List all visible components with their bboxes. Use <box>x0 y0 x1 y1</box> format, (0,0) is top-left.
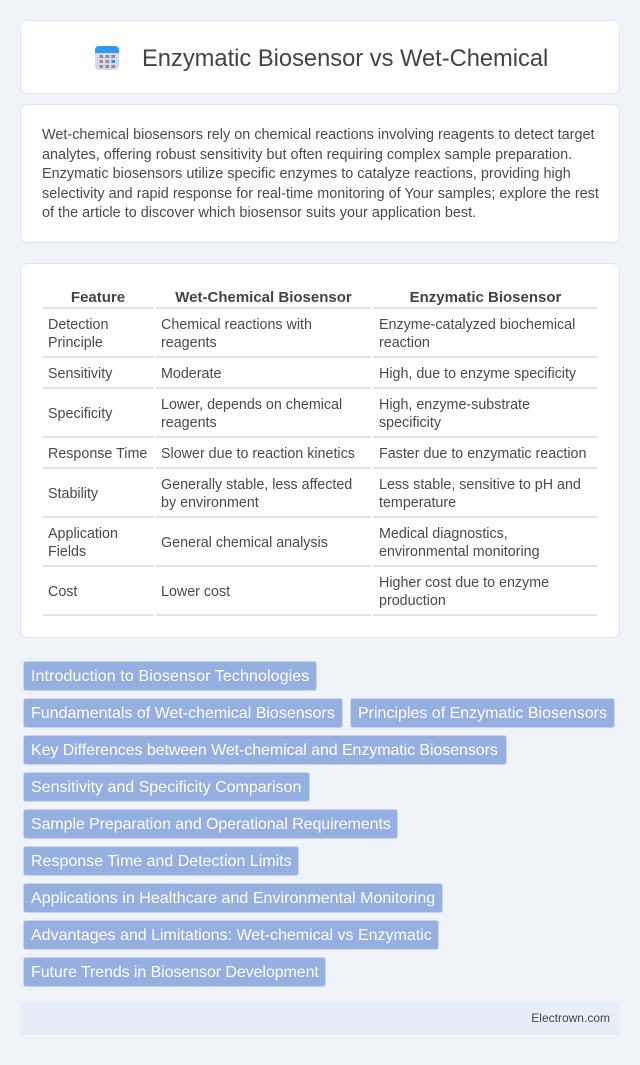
row: detection principle <box>48 317 575 351</box>
tag: sensitivity <box>23 772 310 802</box>
row: specificity: High, enzyme-substrate <box>379 397 530 413</box>
row: stability: by environment <box>161 495 259 511</box>
tag: response time: Response Time and Detection Limits <box>31 853 292 870</box>
row: specificity: specificity <box>379 415 441 431</box>
intro paragraph: Enzymatic biosensors utilize specific enzymes to catalyze reactions, providing high <box>42 166 571 182</box>
row: specificity <box>48 397 530 431</box>
row: detection principle: Enzyme-catalyzed biochemical <box>379 317 575 333</box>
row: cost <box>48 575 549 609</box>
row: application fields: Fields <box>48 544 86 560</box>
row: specificity: reagents <box>161 415 217 431</box>
intro paragraph: Wet-chemical biosensors rely on chemical reactions involving reagents to detect target <box>42 127 595 143</box>
tag: applications <box>23 883 443 913</box>
row: cost: Cost <box>48 584 77 600</box>
header panel <box>20 20 620 94</box>
tag: introduction: Introduction to Biosensor Technologies <box>31 668 309 685</box>
footer <box>20 1002 620 1035</box>
row: response time: Slower due to reaction kinetics <box>161 446 355 462</box>
tag: sensitivity: Sensitivity and Specificity Comparison <box>31 779 301 796</box>
tag: sample preparation <box>23 809 398 839</box>
panel: comparison table <box>20 263 620 638</box>
intro text panel <box>20 104 620 243</box>
tag: future trends: Future Trends in Biosensor Development <box>31 964 319 981</box>
row: application fields: General chemical analysis <box>161 535 328 551</box>
row: stability <box>48 477 581 511</box>
tag: sample preparation: Sample Preparation and Operational Requirements <box>31 816 391 833</box>
row: detection principle: Detection <box>48 317 108 333</box>
table header row: Feature <box>71 289 125 306</box>
row: specificity: Lower, depends on chemical <box>161 397 342 413</box>
row: detection principle: reaction <box>379 335 430 351</box>
tag: fundamentals <box>23 698 343 728</box>
title: Enzymatic Biosensor vs Wet-Chemical <box>142 46 548 72</box>
table header row: Wet-Chemical Biosensor <box>175 289 352 306</box>
tag: advantages <box>23 920 439 950</box>
row: sensitivity <box>48 366 576 382</box>
intro paragraph: selectivity and rapid response for real-time monitoring of Your samples; explore the rest <box>42 186 599 202</box>
table header row: Enzymatic Biosensor <box>410 289 561 306</box>
tag: introduction <box>23 661 317 691</box>
row: application fields <box>48 526 540 560</box>
row: detection principle: Chemical reactions with <box>161 317 312 333</box>
tag: response time <box>23 846 299 876</box>
tag: principles: Principles of Enzymatic Biosensors <box>358 705 607 722</box>
row: response time <box>48 446 586 462</box>
row: sensitivity: Moderate <box>161 366 221 382</box>
intro paragraph: of the article to discover which biosensor suits your application best. <box>42 205 476 221</box>
row: response time: Faster due to enzymatic reaction <box>379 446 586 462</box>
row: application fields: Medical diagnostics, <box>379 526 508 542</box>
row: specificity: Specificity <box>48 406 112 422</box>
row: detection principle: reagents <box>161 335 217 351</box>
intro paragraph <box>42 127 599 221</box>
row: application fields: environmental monitoring <box>379 544 540 560</box>
row: cost: production <box>379 593 446 609</box>
row: stability: Stability <box>48 486 98 502</box>
icon: calendar <box>95 46 119 70</box>
row: stability: temperature <box>379 495 456 511</box>
row: stability: Less stable, sensitive to pH and <box>379 477 581 493</box>
tag: principles <box>350 698 615 728</box>
tag: advantages: Advantages and Limitations: Wet-chemical vs Enzymatic <box>31 927 432 944</box>
tag: key differences <box>23 735 507 765</box>
tag: future trends <box>23 957 326 987</box>
row: application fields: Application <box>48 526 118 542</box>
row: detection principle: Principle <box>48 335 103 351</box>
row: sensitivity: Sensitivity <box>48 366 112 382</box>
row: cost: Higher cost due to enzyme <box>379 575 549 591</box>
intro paragraph: analytes, offering robust sensitivity but often requiring complex sample preparation. <box>42 146 572 162</box>
footer credit: Electrown.com <box>531 1011 610 1025</box>
tag: key differences: Key Differences between Wet-chemical and Enzymatic Biosensors <box>31 742 498 759</box>
row: sensitivity: High, due to enzyme specificity <box>379 366 576 382</box>
row: stability: Generally stable, less affected <box>161 477 352 493</box>
tag: applications: Applications in Healthcare and Environmental Monitoring <box>31 890 435 907</box>
row: cost: Lower cost <box>161 584 230 600</box>
table header row <box>71 289 562 306</box>
comparison table <box>43 289 597 616</box>
row: response time: Response Time <box>48 446 147 462</box>
tag: fundamentals: Fundamentals of Wet-chemical Biosensors <box>31 705 335 722</box>
